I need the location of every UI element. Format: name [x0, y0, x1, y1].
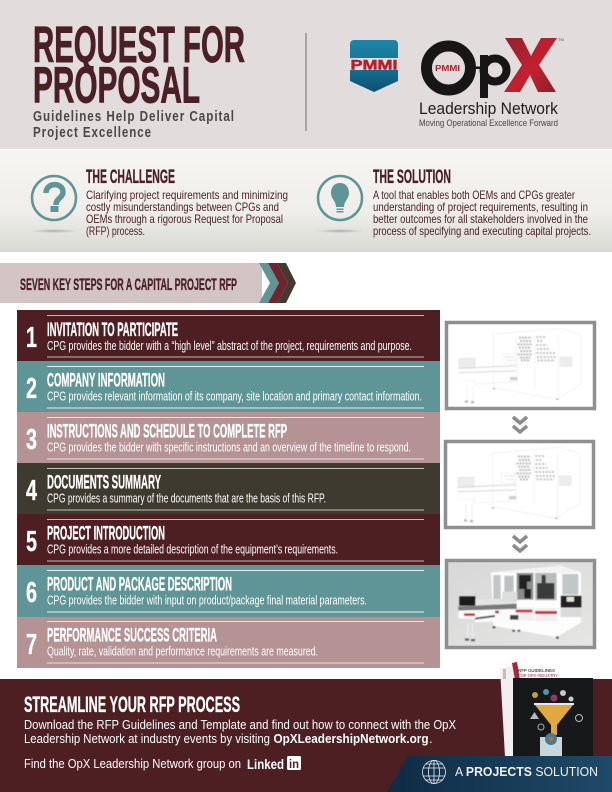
- title: REQUEST FOR: [33, 16, 245, 73]
- title: PROPOSAL: [33, 56, 200, 114]
- text: the challenge: OEMs through a rigorous Request for Proposal: [86, 212, 283, 226]
- text: the solution: THE SOLUTION: [373, 167, 451, 188]
- step 4: CPG provides a summary of the documents that are the basis of this RFP.: [47, 490, 326, 506]
- footer text: Find the OpX Leadership Network group on: [24, 756, 241, 771]
- step 5: [17, 514, 440, 565]
- footer text: .: [429, 731, 433, 746]
- text: the challenge: THE CHALLENGE: [86, 167, 175, 188]
- title: [33, 16, 245, 114]
- step 4: [17, 463, 440, 514]
- step 6: 6: [26, 577, 37, 609]
- section ribbon: seven key steps: [0, 263, 296, 303]
- icon: OpX logo: Moving Operational Excellence Forward: [419, 118, 558, 129]
- footer text: OpXLeadershipNetwork.org: [274, 731, 429, 746]
- step 3: CPG provides the bidder with specific instructions and an overview of the timeline to respond.: [47, 440, 411, 454]
- step 3: INSTRUCTIONS AND SCHEDULE TO COMPLETE RFP: [47, 422, 287, 442]
- step 7: [17, 617, 440, 668]
- step 2: CPG provides relevant information of its company, site location and primary contact information.: [47, 388, 422, 404]
- subtitle: [33, 109, 235, 141]
- step 1: INVITATION TO PARTICIPATE: [47, 320, 178, 341]
- machine image: finished stage: [445, 559, 596, 649]
- banner: a projects solution: [387, 756, 612, 792]
- banner: a projects solution: A PROJECTS SOLUTION: [455, 765, 598, 779]
- arrow: double chevron down: [513, 417, 527, 432]
- footer text: [24, 717, 456, 771]
- icon: LinkedIn logo: Linked: [247, 757, 284, 772]
- icon: globe: [422, 760, 446, 784]
- subtitle: Guidelines Help Deliver Capital: [33, 109, 235, 125]
- section ribbon: seven key steps: SEVEN KEY STEPS FOR A CAPITAL PROJECT RFP: [20, 276, 237, 294]
- text: the solution: [373, 167, 591, 238]
- text: the challenge: (RFP) process.: [86, 224, 145, 238]
- panel: challenge and solution: [0, 150, 612, 252]
- step 7: Quality, rate, validation and performance requirements are measured.: [47, 644, 318, 658]
- icon: OpX logo: Leadership Network: [419, 99, 558, 118]
- step 1: [17, 310, 440, 361]
- step 3: 3: [26, 424, 37, 456]
- step 5: CPG provides a more detailed description of the equipment’s requirements.: [47, 542, 338, 556]
- step 4: 4: [26, 475, 37, 507]
- step 7: 7: [26, 629, 37, 661]
- footer text: Download the RFP Guidelines and Template and find out how to connect with the OpX: [24, 717, 456, 732]
- icon: OpX logo: TM: [558, 37, 564, 42]
- guidelines book: [500, 662, 593, 757]
- step 7: PERFORMANCE SUCCESS CRITERIA: [47, 626, 217, 646]
- step 3: [17, 412, 440, 463]
- icon: PMMI shield logo: [350, 40, 398, 92]
- step 2: COMPANY INFORMATION: [47, 370, 165, 392]
- step 2: [17, 361, 440, 412]
- step 6: CPG provides the bidder with input on product/package final material parameters.: [47, 592, 367, 608]
- step 4: DOCUMENTS SUMMARY: [47, 472, 161, 494]
- header panel: [0, 0, 612, 149]
- icon: OpX logo: [419, 37, 564, 129]
- step 5: PROJECT INTRODUCTION: [47, 524, 165, 544]
- icon: LinkedIn logo: in: [289, 757, 299, 771]
- guidelines book: FOR OPX INDUSTRY: [518, 673, 558, 678]
- footer panel: [0, 662, 612, 792]
- subtitle: Project Excellence: [33, 125, 152, 141]
- machine image: stage 2: [444, 440, 595, 529]
- icon: OpX logo: PMMI: [435, 64, 460, 73]
- text: the challenge: Clarifying project requirements and minimizing: [86, 188, 288, 202]
- icon: PMMI shield logo: PMMI: [350, 56, 398, 72]
- step 1: 1: [26, 322, 37, 354]
- guidelines book: RFP GUIDELINES: [518, 668, 555, 673]
- arrow: double chevron down: [513, 536, 527, 551]
- machine image: stage 1: [445, 321, 596, 410]
- footer text: Leadership Network at industry events by visiting: [24, 731, 270, 746]
- steps list: [17, 310, 440, 668]
- text: the challenge: costly misunderstandings between CPGs and: [86, 200, 279, 214]
- step 2: 2: [26, 373, 37, 405]
- step 6: PRODUCT AND PACKAGE DESCRIPTION: [47, 574, 232, 596]
- footer heading: STREAMLINE YOUR RFP PROCESS: [24, 692, 240, 717]
- icon: question mark: [30, 176, 78, 233]
- step 5: 5: [26, 526, 37, 558]
- step 1: CPG provides the bidder with a “high level” abstract of the project, requirements and purpose.: [47, 338, 412, 353]
- text: the challenge: [86, 167, 288, 238]
- step 6: [17, 565, 440, 617]
- icon: light bulb: [316, 176, 364, 233]
